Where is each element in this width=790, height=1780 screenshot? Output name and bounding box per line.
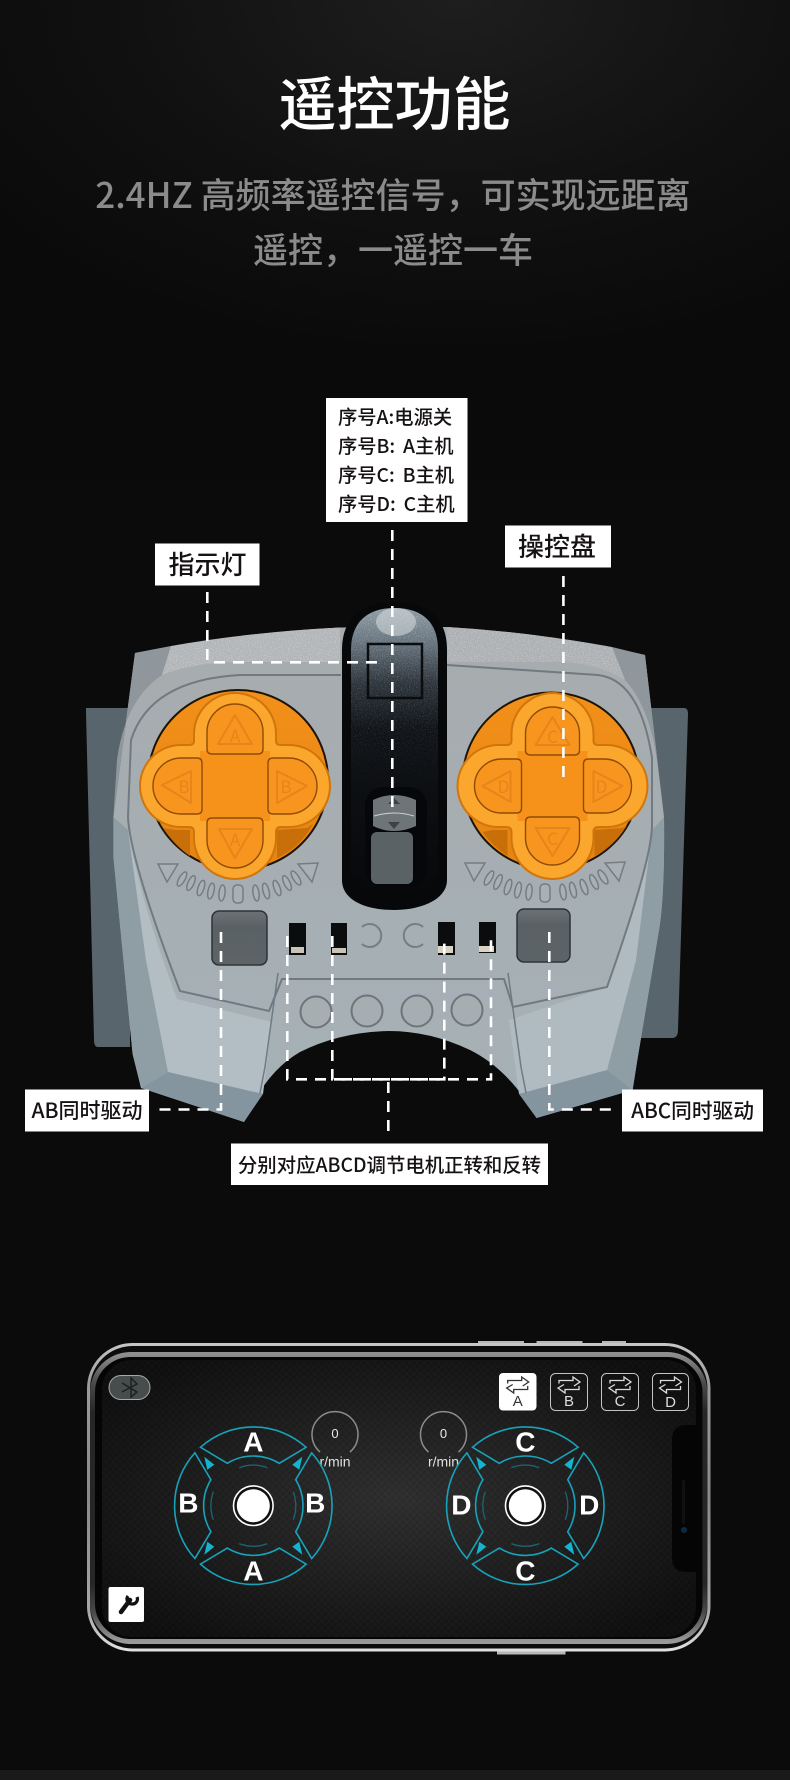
- left joystick: [175, 1427, 332, 1587]
- phone screen: [102, 1360, 696, 1637]
- right joystick: D: [451, 1490, 471, 1521]
- right joystick: D: [579, 1490, 599, 1521]
- label: speed sequence box: 序号D: C主机: [338, 489, 455, 517]
- right dial: [458, 692, 647, 879]
- label: speed sequence box: 序号B: A主机: [338, 431, 454, 459]
- left joystick: B: [178, 1488, 198, 1519]
- lower right bevel: [519, 1070, 633, 1118]
- recessed panel outline: [128, 665, 652, 1011]
- subtitle text block: [95, 168, 691, 274]
- label: control dial: [505, 526, 611, 568]
- side grip right: [640, 708, 688, 1038]
- dashed leader lines: [156, 530, 616, 1138]
- right joystick: C: [515, 1427, 535, 1458]
- phone side buttons: [478, 1341, 626, 1654]
- label: AB drive: [25, 1090, 149, 1132]
- mode tab D: D: [665, 1394, 676, 1411]
- label: ABC drive: ABC同时驱动: [631, 1094, 754, 1124]
- right rpm gauge: [420, 1412, 466, 1470]
- power indicator square: [368, 644, 422, 698]
- left cross body: [140, 693, 330, 879]
- label: control dial: 操控盘: [518, 527, 596, 564]
- button C up: [526, 707, 580, 755]
- button B left: B: [178, 773, 190, 798]
- button C down: C: [547, 825, 558, 850]
- right joystick: C: [515, 1556, 535, 1587]
- left rpm gauge: [312, 1412, 358, 1470]
- ABC simultaneous button: [517, 909, 570, 962]
- metal pill face: [351, 608, 438, 896]
- mode tab C: C: [615, 1393, 626, 1410]
- label: ABCD motor direction: 分别对应ABCD调节电机正转和反转: [238, 1149, 541, 1178]
- label: AB drive: AB同时驱动: [31, 1095, 143, 1125]
- lower right light panel: [509, 830, 652, 1094]
- subtitle text block: 2.4HZ 高频率遥控信号，可实现远距离: [95, 168, 691, 219]
- remote controller photo illustration: [86, 602, 688, 1122]
- button D right: [584, 759, 632, 813]
- button D left: [474, 759, 522, 813]
- lower left light panel: [128, 830, 272, 1094]
- phone notch: [672, 1425, 696, 1572]
- label: ABCD motor direction: [231, 1144, 548, 1185]
- center control pill: [342, 602, 447, 910]
- side grip left: [86, 708, 130, 1047]
- mode tab B: [550, 1374, 588, 1410]
- left outer strip: [113, 817, 168, 1088]
- label: indicator light: [155, 544, 260, 586]
- button A down: [207, 818, 263, 868]
- rotation arrows: [362, 924, 423, 947]
- upper right bevel: [612, 647, 664, 817]
- bluetooth button: [109, 1376, 150, 1400]
- left joystick: A: [243, 1556, 263, 1587]
- right joystick: [447, 1427, 604, 1587]
- button B right: B: [280, 773, 292, 798]
- button C up: C: [547, 723, 558, 748]
- button B left: [153, 758, 202, 814]
- mode tab A: [499, 1373, 536, 1410]
- phone mockup: [88, 1341, 709, 1654]
- mode tab D: [652, 1374, 688, 1411]
- right cross body: [458, 693, 647, 879]
- AB simultaneous button: [212, 911, 267, 965]
- left speed ticks: [158, 863, 318, 903]
- left joystick: A: [243, 1427, 263, 1458]
- label: speed sequence box: 序号A:电源关: [338, 402, 452, 430]
- label: speed sequence box: 序号C: B主机: [338, 460, 454, 488]
- label: indicator light: 指示灯: [168, 545, 247, 582]
- remote body silhouette: [113, 627, 664, 1122]
- right rpm gauge: r/min: [428, 1454, 459, 1470]
- label: ABC drive: [622, 1090, 763, 1132]
- left dial: [140, 690, 330, 879]
- upper right speckled plate: [447, 627, 625, 680]
- button B right: [268, 758, 317, 814]
- button C down: [526, 817, 580, 865]
- lower left bevel: [142, 1072, 263, 1122]
- upper left bevel: [113, 646, 171, 817]
- subtitle text block: 遥控，一遥控一车: [253, 223, 533, 274]
- left rpm gauge: r/min: [319, 1454, 351, 1470]
- mode tab B: B: [564, 1393, 574, 1410]
- mode tab A: A: [513, 1393, 523, 1410]
- button A down: A: [230, 826, 241, 851]
- speed slider: [365, 787, 427, 887]
- label: speed sequence box: [326, 398, 468, 522]
- left joystick: B: [305, 1488, 325, 1519]
- mode tab C: [602, 1374, 638, 1410]
- button D right: D: [596, 773, 607, 798]
- title: 遥控功能: [278, 58, 511, 142]
- button D left: D: [498, 773, 509, 798]
- left rpm gauge: 0: [331, 1426, 339, 1441]
- upper left speckled plate: [162, 628, 340, 675]
- right rpm gauge: 0: [440, 1426, 447, 1441]
- right speed ticks: [465, 862, 625, 902]
- calibration knobs: [300, 994, 482, 1028]
- center section side lines: [260, 973, 526, 1093]
- indicator slots: [289, 922, 496, 955]
- wrench settings button: [108, 1587, 144, 1622]
- button A up: [207, 704, 263, 754]
- button A up: A: [230, 722, 241, 747]
- right outer strip: [607, 817, 664, 1090]
- phone frame: [88, 1344, 709, 1650]
